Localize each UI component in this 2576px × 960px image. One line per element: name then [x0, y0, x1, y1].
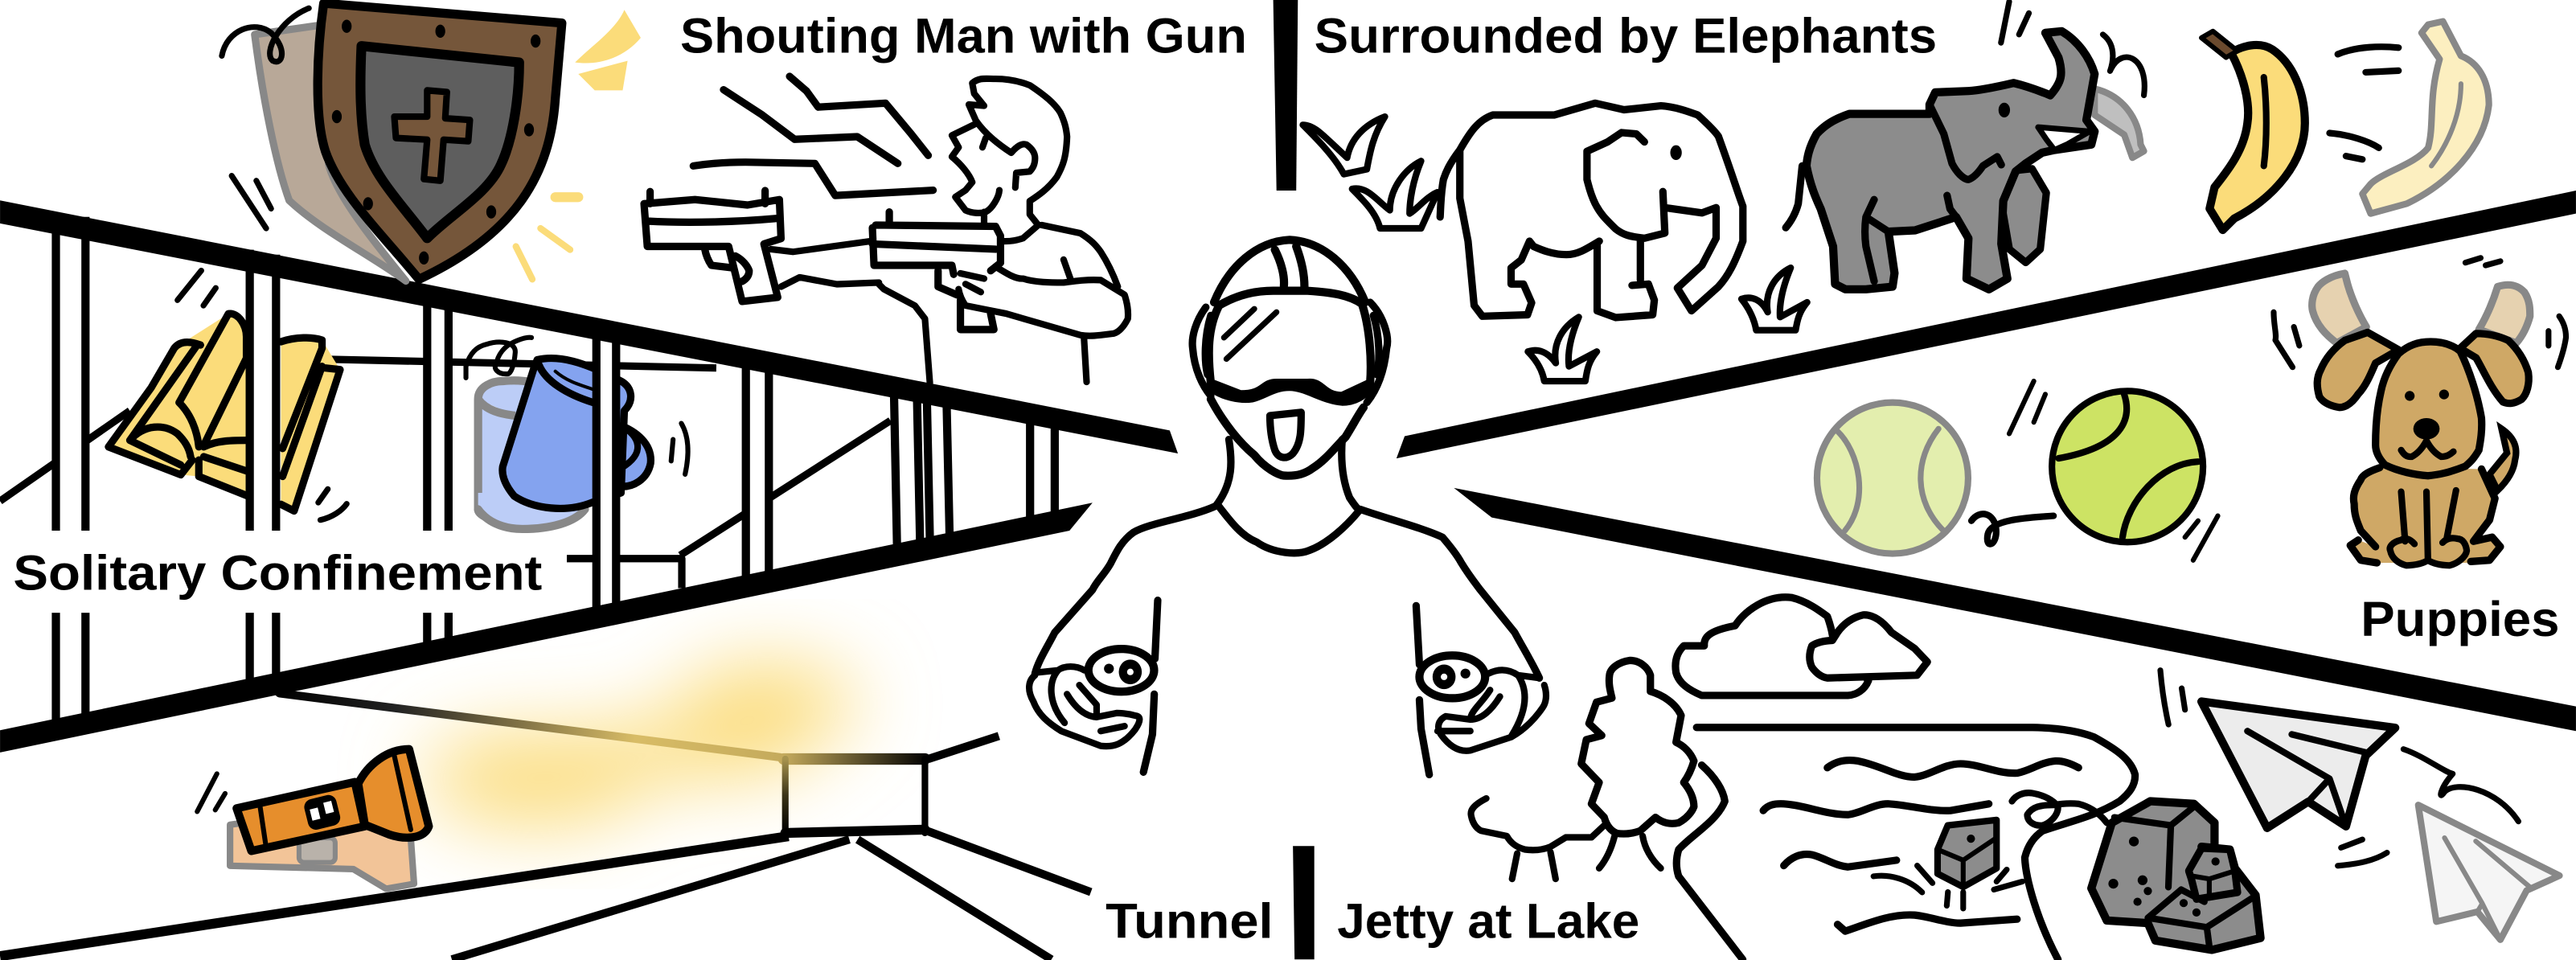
icon: small jetty rock — [1873, 820, 2022, 909]
torso and arms — [1035, 440, 1540, 678]
mouth — [1270, 412, 1301, 457]
icon: trees — [1471, 660, 1694, 879]
icon: dog ghost ears — [2312, 273, 2530, 343]
label: Tunnel: Tunnel — [1105, 894, 1274, 949]
visor — [1192, 291, 1388, 403]
squiggle — [2012, 793, 2106, 826]
icon: ghost paper plane — [2418, 805, 2560, 940]
label: Jetty at Lake: Jetty at Lake — [1337, 894, 1639, 949]
icon: paper plane — [2160, 671, 2518, 866]
icon: book — [109, 314, 340, 511]
icon: grey elephant — [1786, 2, 2144, 289]
icon: mug ghost — [478, 380, 551, 527]
left hand with controller — [1029, 601, 1158, 772]
label: Puppies: Puppies — [2361, 592, 2560, 646]
panel: tunnel — [0, 663, 1274, 959]
icon: tennis ball — [1971, 381, 2218, 560]
lake shore — [1676, 728, 2135, 959]
cell bars — [56, 214, 1055, 726]
icon: gun front — [644, 191, 781, 302]
icon: mug — [178, 271, 688, 520]
icon: ghost trunk — [2094, 88, 2144, 158]
label: Solitary Confinement: Solitary Confinement — [13, 546, 542, 601]
label: Surrounded by Elephants: Surrounded by Elephants — [1315, 8, 1937, 63]
icon: grass tufts — [1302, 117, 1807, 381]
icon: banana ghost — [2362, 22, 2489, 214]
icon: dog — [2274, 258, 2566, 565]
icon: large rocks — [2091, 802, 2261, 950]
icon: banana — [2201, 31, 2398, 230]
icon: shield — [318, 3, 562, 279]
lake waves — [1763, 760, 2078, 931]
helmet — [1214, 240, 1365, 302]
icon: ghost tennis ball — [1817, 403, 1968, 554]
label: Shouting Man with Gun: Shouting Man with Gun — [680, 8, 1247, 63]
icon: sparkles — [516, 10, 641, 279]
icon: flashlight ghost — [230, 813, 414, 888]
panel: solitary confinement — [0, 214, 1055, 726]
face — [1211, 400, 1364, 476]
panel: jetty at lake — [1337, 597, 2560, 959]
man figure — [771, 79, 1128, 383]
right hand with controller — [1416, 605, 1546, 774]
icon: clouds — [1676, 597, 1927, 695]
icon: white elephant — [1440, 103, 1743, 318]
cell back walls — [0, 359, 891, 589]
icon: gun back — [872, 212, 1000, 330]
shout lines — [693, 76, 933, 195]
panel: shield — [222, 3, 641, 281]
motion lines — [222, 8, 309, 228]
panel: puppies — [1817, 258, 2566, 646]
icon: flashlight — [197, 749, 429, 851]
panel: surrounded by elephants — [1302, 2, 2144, 381]
flashlight glow — [422, 663, 858, 825]
tunnel walls — [0, 693, 1091, 959]
icon: shield ghost — [255, 25, 406, 281]
panel: VR user — [1029, 240, 1546, 774]
panel: shouting man with gun — [644, 8, 1247, 383]
ghost mug base — [478, 493, 585, 529]
